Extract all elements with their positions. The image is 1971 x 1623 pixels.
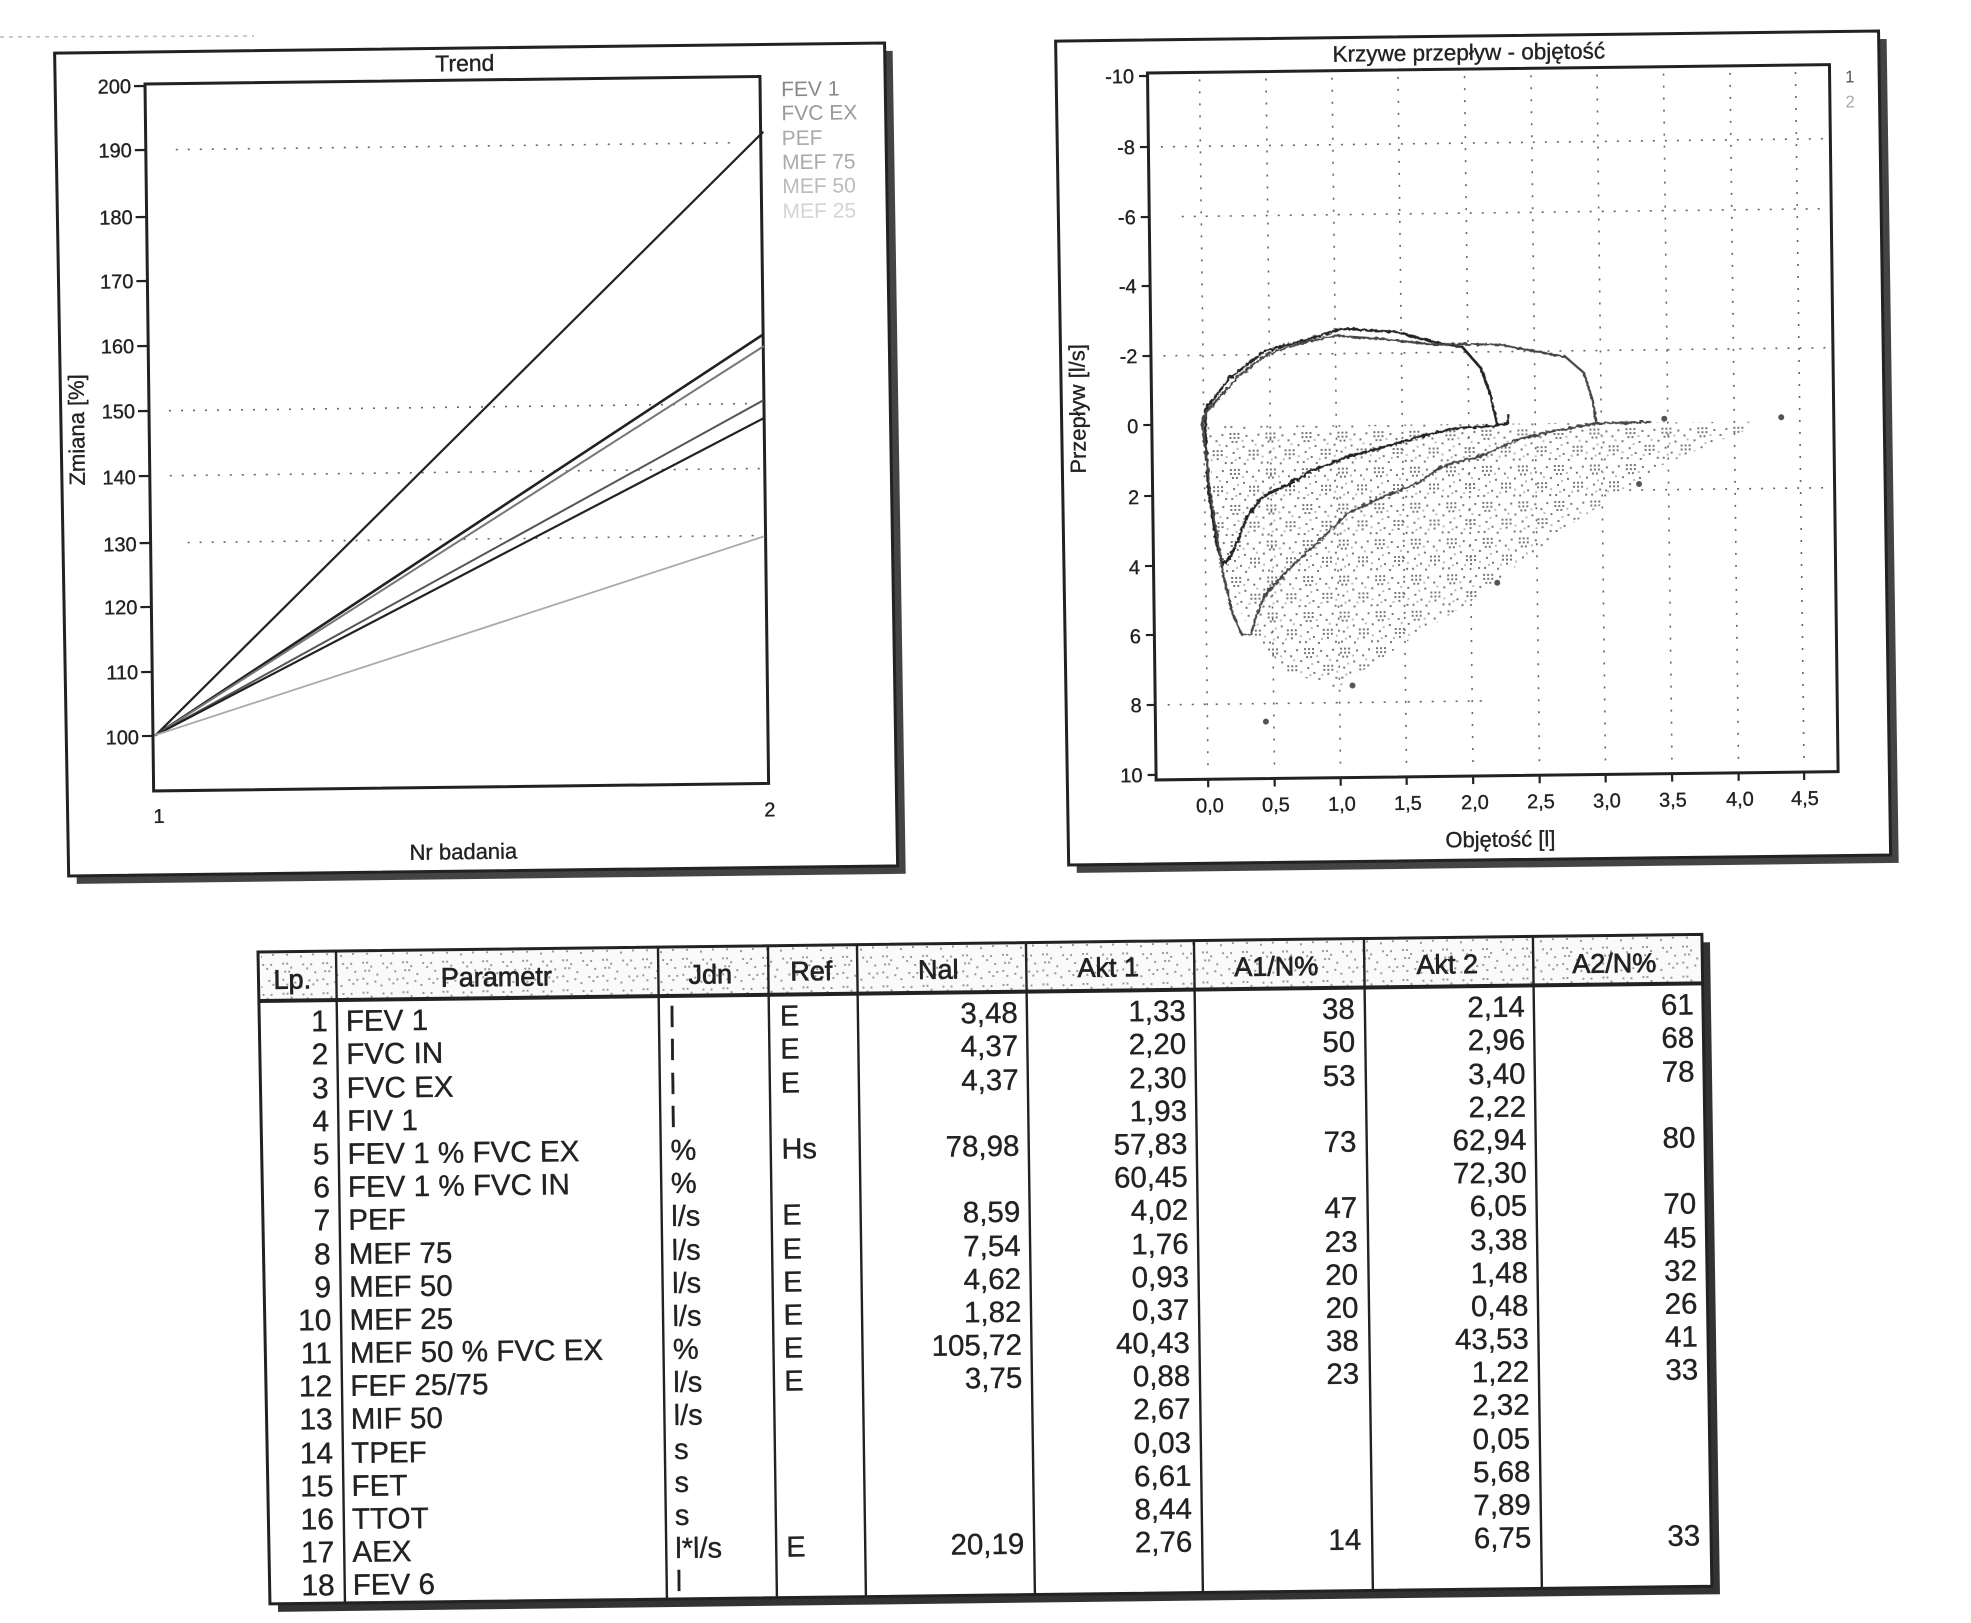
column: measurement 2: 62,94 bbox=[1452, 1124, 1527, 1157]
predicted value markers bbox=[1259, 414, 1788, 725]
column: measurement 2 bbox=[1451, 991, 1531, 1555]
predicted range: stippled area bbox=[1207, 419, 1770, 690]
y axis labels: flow: 6 bbox=[1130, 626, 1141, 648]
column: A1/N percent bbox=[1322, 993, 1361, 1557]
column: parameter names: MEF 75 bbox=[348, 1237, 453, 1271]
column: predicted values: 3,48 bbox=[960, 997, 1018, 1030]
column: row numbers: 13 bbox=[299, 1403, 333, 1437]
column: A2/N percent: 70 bbox=[1663, 1187, 1696, 1221]
column: row numbers: 7 bbox=[313, 1204, 330, 1237]
column: parameter names: MIF 50 bbox=[351, 1402, 443, 1436]
column: A2/N percent: 61 bbox=[1661, 988, 1694, 1022]
column: A1/N percent: 47 bbox=[1324, 1192, 1357, 1225]
y axis labels: change percent bbox=[98, 76, 139, 750]
x axis labels: volume bbox=[1196, 788, 1819, 817]
x axis title: Nr badania bbox=[409, 839, 518, 865]
x axis labels: volume: 2,5 bbox=[1527, 791, 1555, 813]
y axis labels: flow: 2 bbox=[1128, 487, 1139, 509]
table header: Nal bbox=[918, 954, 959, 985]
x axis labels: volume: 4,5 bbox=[1791, 788, 1819, 810]
x axis labels: 1 bbox=[153, 806, 165, 828]
column: A1/N percent: 20 bbox=[1325, 1259, 1358, 1292]
column: reference: E bbox=[783, 1299, 803, 1332]
y axis labels: change percent: 200 bbox=[98, 76, 131, 99]
column: row numbers: 4 bbox=[312, 1105, 329, 1138]
column: measurement 1: 0,37 bbox=[1132, 1294, 1190, 1327]
column: parameter names: MEF 25 bbox=[349, 1303, 453, 1337]
column: units: l/s bbox=[672, 1301, 702, 1333]
column: predicted values: 20,19 bbox=[950, 1528, 1024, 1562]
column: A1/N percent: 53 bbox=[1323, 1060, 1356, 1093]
column: predicted values: 4,37 bbox=[961, 1030, 1018, 1063]
table header: Ref bbox=[790, 956, 833, 987]
column: A2/N percent bbox=[1661, 988, 1700, 1553]
column: measurement 1: 1,76 bbox=[1131, 1228, 1189, 1261]
column: A1/N percent: 73 bbox=[1323, 1126, 1357, 1159]
y axis labels: flow: -10 bbox=[1105, 66, 1134, 88]
column: units: l/s bbox=[673, 1367, 702, 1399]
column: row numbers: 18 bbox=[301, 1569, 335, 1603]
x axis labels: volume: 0,5 bbox=[1262, 794, 1290, 817]
column: units: % bbox=[671, 1168, 697, 1200]
column: row numbers: 6 bbox=[313, 1171, 330, 1204]
table header: A2/N% bbox=[1572, 948, 1656, 979]
column: parameter names bbox=[346, 1002, 606, 1602]
x axis labels: volume: 0,0 bbox=[1196, 795, 1224, 817]
column: parameter names: FEV 1 % FVC EX bbox=[347, 1135, 580, 1171]
column: predicted values: 3,75 bbox=[965, 1362, 1022, 1395]
table header: Akt 2 bbox=[1416, 949, 1478, 980]
column: parameter names: FVC IN bbox=[346, 1037, 443, 1071]
x axis labels: volume: 1,0 bbox=[1328, 793, 1356, 816]
column: predicted values: 8,59 bbox=[963, 1196, 1020, 1229]
column: measurement 1: 60,45 bbox=[1114, 1161, 1188, 1195]
column: reference: E bbox=[782, 1199, 802, 1232]
y axis labels: flow: -2 bbox=[1120, 346, 1138, 368]
column: parameter names: FEV 1 bbox=[346, 1004, 428, 1038]
y axis labels: change percent: 100 bbox=[105, 727, 139, 750]
column: row numbers: 1 bbox=[311, 1005, 328, 1038]
column: units: l/s bbox=[672, 1268, 701, 1300]
legend: series names: MEF 25 bbox=[782, 199, 856, 223]
column: row numbers bbox=[294, 1005, 335, 1603]
column: measurement 1: 4,02 bbox=[1131, 1194, 1188, 1227]
heading: flow-volume: Krzywe przepływ - objętość bbox=[1332, 38, 1605, 67]
y axis labels: flow: 4 bbox=[1129, 557, 1140, 579]
x axis labels: volume: 3,5 bbox=[1659, 789, 1687, 812]
column: units bbox=[669, 1001, 723, 1598]
column: measurement 2: 43,53 bbox=[1455, 1323, 1529, 1356]
y axis labels: change percent: 110 bbox=[106, 662, 138, 685]
column: parameter names: FEV 1 % FVC IN bbox=[348, 1168, 570, 1204]
column: row numbers: 5 bbox=[313, 1138, 330, 1171]
column: row numbers: 12 bbox=[299, 1370, 333, 1404]
column: measurement 2: 2,22 bbox=[1468, 1091, 1526, 1124]
legend: series names bbox=[781, 77, 859, 223]
y axis title: Przepływ [l/s] bbox=[1064, 344, 1091, 474]
legend: series names: PEF bbox=[782, 127, 823, 150]
y axis labels: change percent: 160 bbox=[101, 336, 134, 359]
column: units: s bbox=[674, 1467, 689, 1499]
column: measurement 2: 7,89 bbox=[1473, 1489, 1531, 1522]
table header: Akt 1 bbox=[1077, 952, 1139, 983]
legend: measurement numbers: 2 bbox=[1845, 92, 1855, 111]
y axis labels: flow: -6 bbox=[1118, 207, 1136, 229]
column: row numbers: 9 bbox=[314, 1271, 331, 1304]
column: A2/N percent: 41 bbox=[1665, 1320, 1698, 1354]
column: row numbers: 17 bbox=[301, 1536, 335, 1570]
column: units: l bbox=[676, 1566, 682, 1598]
column: units: l bbox=[670, 1102, 677, 1134]
column: measurement 2: 0,48 bbox=[1471, 1290, 1529, 1323]
column: units: l bbox=[669, 1069, 676, 1101]
legend: measurement numbers: 1 bbox=[1845, 67, 1855, 86]
column: row numbers: 11 bbox=[301, 1337, 332, 1371]
y axis labels: change percent: 130 bbox=[103, 534, 137, 557]
y axis labels: flow bbox=[1105, 66, 1143, 787]
column: predicted values bbox=[927, 997, 1024, 1562]
x axis labels bbox=[153, 798, 776, 829]
column: reference: E bbox=[786, 1531, 806, 1564]
column: A1/N percent: 20 bbox=[1325, 1292, 1359, 1325]
column: predicted values: 1,82 bbox=[964, 1296, 1022, 1329]
table header: Jdn bbox=[688, 959, 732, 990]
column: measurement 2: 6,75 bbox=[1474, 1522, 1531, 1555]
column: A1/N percent: 38 bbox=[1322, 993, 1355, 1026]
y axis labels: flow: -8 bbox=[1117, 137, 1135, 159]
column: parameter names: MEF 50 bbox=[349, 1270, 453, 1304]
panel: flow-volume chart bbox=[1056, 31, 1899, 873]
y axis labels: change percent: 140 bbox=[102, 467, 136, 490]
column: measurement 1 bbox=[1112, 995, 1192, 1560]
column: reference: Hs bbox=[781, 1133, 817, 1166]
column: units: l*l/s bbox=[675, 1532, 722, 1565]
trend lines bbox=[149, 132, 770, 735]
column: units: % bbox=[670, 1135, 696, 1167]
column: measurement 1: 0,03 bbox=[1133, 1427, 1191, 1460]
column: A1/N percent: 14 bbox=[1328, 1524, 1361, 1557]
column: measurement 1: 1,33 bbox=[1128, 995, 1186, 1028]
column: reference: E bbox=[782, 1233, 802, 1266]
column: row numbers: 8 bbox=[314, 1238, 331, 1271]
legend: series names: FVC EX bbox=[781, 101, 857, 125]
heading: Trend: Trend bbox=[435, 50, 495, 76]
column: A2/N percent: 80 bbox=[1662, 1121, 1696, 1155]
column: row numbers: 10 bbox=[298, 1304, 332, 1338]
y axis labels: flow: 8 bbox=[1130, 695, 1142, 717]
column: reference: E bbox=[780, 1000, 799, 1033]
column: measurement 1: 6,61 bbox=[1134, 1460, 1192, 1493]
column: A2/N percent: 45 bbox=[1664, 1221, 1697, 1255]
column: row numbers: 14 bbox=[300, 1437, 333, 1471]
column: units: l bbox=[669, 1035, 676, 1067]
y axis labels: change percent: 120 bbox=[104, 597, 138, 620]
legend: measurement numbers bbox=[1845, 67, 1855, 111]
column: A1/N percent: 38 bbox=[1326, 1325, 1359, 1358]
column: A2/N percent: 78 bbox=[1662, 1055, 1695, 1089]
x axis labels: volume: 2,0 bbox=[1461, 792, 1489, 814]
column: row numbers: 2 bbox=[311, 1038, 328, 1071]
y axis labels: change percent: 180 bbox=[99, 207, 133, 230]
column: parameter names: TPEF bbox=[351, 1436, 427, 1470]
column: units: s bbox=[675, 1500, 690, 1532]
column: reference: E bbox=[783, 1266, 803, 1299]
column: units: l/s bbox=[671, 1201, 700, 1233]
curve: measurement 1 bbox=[1204, 327, 1510, 565]
column: parameter names: AEX bbox=[352, 1535, 412, 1569]
y axis labels: change percent: 170 bbox=[100, 271, 134, 294]
curve: measurement 2 bbox=[1201, 332, 1654, 635]
column: measurement 1: 2,20 bbox=[1129, 1028, 1186, 1061]
column: measurement 1: 2,30 bbox=[1129, 1062, 1187, 1095]
column: parameter names: FET bbox=[351, 1469, 408, 1503]
column: measurement 2: 2,96 bbox=[1468, 1024, 1525, 1057]
column: predicted values: 105,72 bbox=[931, 1329, 1022, 1363]
column: measurement 1: 1,93 bbox=[1129, 1095, 1187, 1128]
column: units: l bbox=[669, 1002, 675, 1034]
column: A2/N percent: 33 bbox=[1667, 1519, 1700, 1553]
x axis labels: volume: 3,0 bbox=[1593, 790, 1621, 813]
column: measurement 2: 2,14 bbox=[1467, 991, 1525, 1024]
column: predicted values: 78,98 bbox=[945, 1130, 1020, 1164]
column: parameter names: PEF bbox=[348, 1203, 406, 1237]
column: units: % bbox=[673, 1334, 699, 1366]
y axis labels: flow: 0 bbox=[1127, 416, 1138, 438]
table header bbox=[259, 936, 1702, 1001]
column: A2/N percent: 33 bbox=[1665, 1353, 1698, 1387]
column: measurement 2: 3,38 bbox=[1470, 1224, 1528, 1257]
column: measurement 2: 1,48 bbox=[1470, 1257, 1528, 1290]
column: measurement 1: 0,88 bbox=[1133, 1360, 1190, 1393]
column: row numbers: 16 bbox=[300, 1503, 334, 1537]
legend: series names: MEF 75 bbox=[782, 150, 856, 174]
x axis labels: 2 bbox=[764, 799, 776, 821]
y axis labels: change percent: 150 bbox=[102, 401, 135, 424]
table header: A1/N% bbox=[1234, 951, 1318, 982]
column: A2/N percent: 26 bbox=[1664, 1287, 1698, 1321]
column: A1/N percent: 23 bbox=[1325, 1226, 1358, 1259]
legend: series names: MEF 50 bbox=[782, 174, 856, 198]
column: measurement 2: 3,40 bbox=[1468, 1058, 1526, 1091]
column: measurement 2: 72,30 bbox=[1453, 1157, 1527, 1190]
y axis labels: flow: 10 bbox=[1120, 765, 1143, 787]
column: reference: E bbox=[784, 1365, 804, 1398]
column: row numbers: 3 bbox=[312, 1072, 329, 1105]
column: parameter names: TTOT bbox=[352, 1502, 429, 1536]
y axis labels: flow: -4 bbox=[1119, 276, 1137, 298]
panel: trend chart bbox=[55, 43, 906, 884]
column: measurement 1: 2,76 bbox=[1135, 1526, 1192, 1559]
column: row numbers: 15 bbox=[300, 1470, 334, 1504]
column: measurement 2: 2,32 bbox=[1472, 1389, 1530, 1422]
column: measurement 1: 2,67 bbox=[1133, 1393, 1191, 1426]
column: A1/N percent: 23 bbox=[1326, 1358, 1359, 1391]
table header: Parametr bbox=[441, 961, 552, 993]
column: predicted values: 4,62 bbox=[963, 1263, 1021, 1296]
column: measurement 1: 0,93 bbox=[1131, 1261, 1189, 1294]
x axis title: Objętość [l] bbox=[1445, 826, 1556, 852]
column: parameter names: FVC EX bbox=[346, 1071, 454, 1105]
column: A2/N percent: 32 bbox=[1664, 1254, 1697, 1288]
column: measurement 2: 1,22 bbox=[1472, 1356, 1529, 1389]
y axis labels: change percent: 190 bbox=[98, 140, 132, 163]
x axis labels: volume: 1,5 bbox=[1394, 793, 1422, 815]
plot area: flow-volume bbox=[1147, 65, 1838, 780]
column: parameter names: FEF 25/75 bbox=[350, 1368, 489, 1403]
column: reference bbox=[780, 1000, 822, 1564]
column: measurement 2: 6,05 bbox=[1470, 1190, 1527, 1223]
y axis title: Zmiana [%] bbox=[64, 374, 90, 486]
column: parameter names: FIV 1 bbox=[347, 1104, 418, 1138]
column: parameter names: FEV 6 bbox=[353, 1568, 435, 1602]
column: measurement 2: 5,68 bbox=[1473, 1456, 1531, 1489]
x axis labels: volume: 4,0 bbox=[1726, 789, 1754, 811]
column: units: l/s bbox=[671, 1235, 701, 1267]
column: predicted values: 7,54 bbox=[963, 1230, 1021, 1263]
column: A1/N percent: 50 bbox=[1322, 1026, 1355, 1059]
column: predicted values: 4,37 bbox=[961, 1064, 1019, 1097]
legend: series names: FEV 1 bbox=[781, 78, 840, 101]
column: units: l/s bbox=[674, 1400, 703, 1432]
column: parameter names: MEF 50 % FVC EX bbox=[350, 1334, 604, 1370]
column: measurement 1: 57,83 bbox=[1113, 1128, 1188, 1162]
column: reference: E bbox=[780, 1033, 800, 1066]
column: A2/N percent: 68 bbox=[1661, 1021, 1694, 1055]
column: reference: E bbox=[784, 1332, 803, 1365]
table header: Lp. bbox=[273, 964, 311, 995]
plot area: trend bbox=[145, 76, 769, 791]
column: measurement 1: 40,43 bbox=[1116, 1327, 1190, 1361]
column: measurement 1: 8,44 bbox=[1134, 1493, 1192, 1526]
column: reference: E bbox=[780, 1067, 800, 1100]
panel: parameters table bbox=[258, 934, 1720, 1612]
column: units: s bbox=[674, 1434, 689, 1466]
column: measurement 2: 0,05 bbox=[1472, 1423, 1530, 1456]
